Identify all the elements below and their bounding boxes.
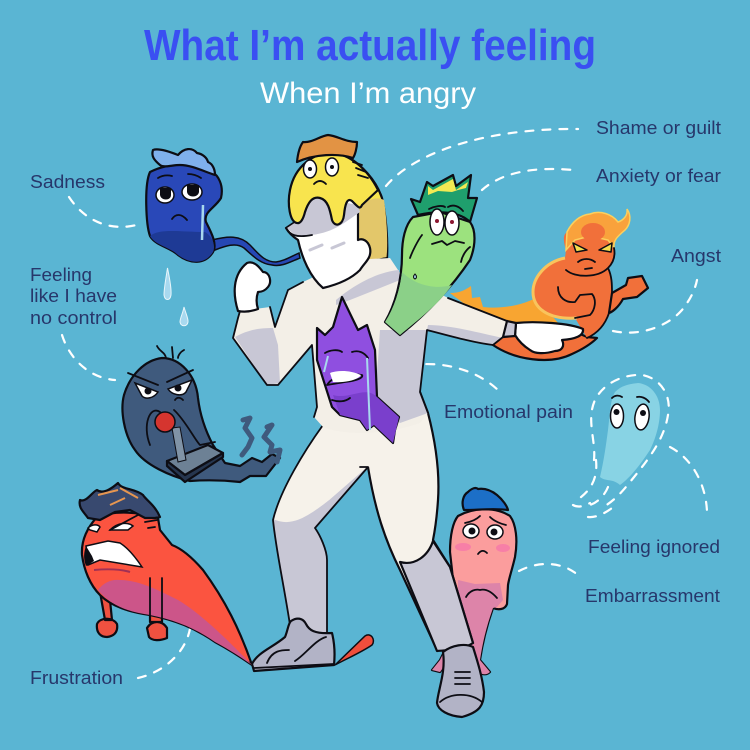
shoe laces [440, 672, 482, 702]
orange forehead [581, 223, 605, 241]
red tail end [335, 635, 373, 665]
green hair [411, 175, 477, 222]
pink lower shade [432, 580, 503, 674]
pink body [432, 509, 516, 674]
label: Angst: Angst [671, 246, 721, 266]
purple face [324, 350, 370, 430]
man front shoe [252, 619, 335, 671]
character: green anxiety [385, 175, 477, 335]
red hair [80, 483, 160, 520]
man head [286, 200, 370, 288]
man cuff [503, 321, 516, 337]
red face [84, 515, 162, 620]
man head shade [287, 195, 360, 236]
man sweater [233, 258, 507, 433]
green hair highlight [428, 179, 468, 195]
ghost body [600, 383, 660, 485]
man back leg [360, 392, 473, 650]
pink face [455, 516, 510, 598]
title: What I’m actually feeling [144, 21, 596, 70]
joystick ball [155, 412, 175, 432]
label: Emotional pain: Emotional pain [444, 402, 573, 422]
yellow character tan shade [358, 198, 387, 262]
subtitle: When I’m angry [260, 77, 476, 110]
joystick [172, 427, 186, 462]
man front leg [273, 405, 420, 640]
smoke [242, 418, 280, 462]
orange face [558, 243, 615, 338]
blue lower shade [150, 231, 214, 262]
orange yellow rim [533, 258, 577, 318]
man sweater outline [233, 282, 507, 417]
ghost eyes [610, 396, 651, 431]
green face [410, 206, 470, 279]
orange body fill [533, 230, 615, 338]
orange hand [609, 276, 648, 313]
label: Feeling ignored: Feeling ignored [588, 537, 720, 557]
man front leg shade [274, 467, 368, 640]
label: Sadness: Sadness [30, 172, 105, 192]
label: Feeling like I have no control [30, 265, 117, 328]
orange head flame [566, 209, 630, 250]
yellow hair [297, 135, 357, 162]
dashed leader lines [62, 129, 707, 678]
red lower band [98, 580, 252, 665]
red body [82, 513, 252, 665]
blue face [156, 174, 203, 240]
label: Feeling like I have no control: Feeling [30, 265, 92, 285]
character: man [233, 155, 583, 717]
label: Feeling like I have no control: no control [30, 308, 117, 328]
man nose and brows [286, 228, 312, 236]
character: red frustration [80, 483, 373, 665]
pink hair [463, 488, 508, 510]
label: Embarrassment: Embarrassment [585, 586, 720, 606]
control body [122, 358, 280, 482]
man back shoe [437, 645, 484, 717]
character: purple emotional pain [317, 297, 399, 443]
man left fist [235, 262, 270, 312]
man sweater shading [235, 270, 503, 423]
yellow front with drips [289, 153, 378, 225]
label: Feeling like I have no control: like I have [30, 286, 117, 306]
control hand [147, 410, 215, 445]
blue tail [212, 237, 300, 265]
red arms [97, 585, 167, 640]
character: orange angst [450, 209, 648, 360]
ghost dashed outline [573, 375, 669, 517]
control face [128, 346, 193, 400]
label: Frustration: Frustration [30, 668, 123, 688]
character: yellow shame [289, 135, 378, 225]
green body [385, 212, 474, 335]
blue body [146, 164, 222, 262]
man right hand [515, 322, 583, 353]
orange tail flame [450, 286, 560, 325]
character: blue sadness [146, 149, 300, 265]
character: pink embarrassment (behind leg) [432, 488, 516, 674]
controller [167, 445, 223, 475]
character: ghost feeling ignored [573, 375, 669, 517]
character: dark control [122, 346, 280, 482]
purple lower shade [333, 392, 399, 443]
tear drops [164, 268, 188, 326]
green lower shade [385, 272, 452, 335]
purple body [317, 297, 399, 443]
blue hair [152, 149, 215, 175]
label: Shame or guilt: Shame or guilt [596, 118, 721, 138]
man back leg shade [400, 541, 473, 651]
label: Anxiety or fear: Anxiety or fear [596, 166, 721, 186]
yellow face [304, 158, 368, 184]
yellow character back dome [345, 155, 387, 265]
orange lower tail [493, 325, 597, 360]
